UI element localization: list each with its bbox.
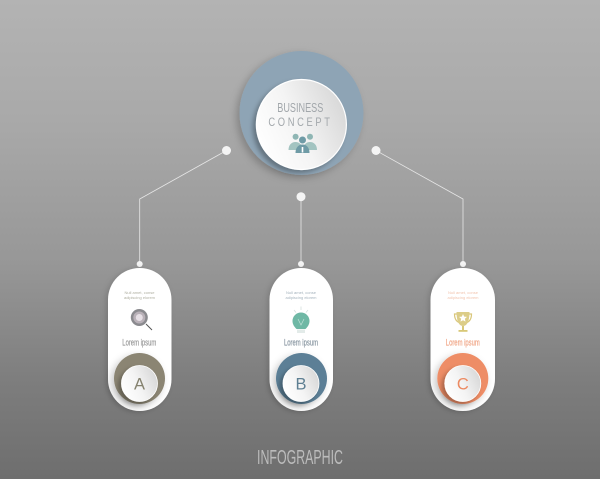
icon: trophy	[454, 312, 472, 332]
connector: centre	[296, 192, 306, 267]
card C small text: adipiscing elorem	[448, 295, 479, 300]
card B label: Lorem ipsum	[284, 338, 318, 348]
card B letter: B	[295, 376, 307, 394]
card A small text	[124, 290, 156, 300]
card B small text	[286, 290, 317, 300]
hub subheading: CONCEPT	[268, 116, 333, 129]
card C small text	[448, 290, 479, 300]
card C	[430, 268, 495, 411]
card A	[108, 268, 172, 411]
card C pill	[430, 268, 495, 411]
card B	[270, 268, 333, 411]
hub backing circle	[240, 51, 364, 175]
card B small text: adipiscing elorem	[286, 295, 317, 300]
hub white disc	[256, 80, 346, 170]
card A pill	[108, 268, 172, 411]
footer title: INFOGRAPHIC	[257, 447, 343, 469]
card A ring	[114, 353, 165, 404]
hub heading: BUSINESS	[277, 101, 323, 115]
card C disc	[445, 366, 481, 402]
card B disc	[283, 366, 319, 402]
card A small text: Null amet, conse	[124, 290, 155, 295]
icon: business people	[288, 134, 317, 153]
card C small text: Null amet, conse	[448, 290, 479, 295]
card B pill	[270, 268, 333, 411]
connector: left	[137, 146, 231, 267]
icon: magnifier	[131, 309, 152, 330]
card B small text: Null amet, conse	[286, 290, 317, 295]
card A label: Lorem ipsum	[122, 338, 156, 348]
central hub	[240, 51, 364, 175]
card C label: Lorem ipsum	[446, 338, 480, 348]
card C letter: C	[457, 376, 469, 394]
card A letter: A	[134, 376, 145, 394]
connector: right	[372, 146, 466, 267]
card A disc	[122, 366, 158, 402]
card A small text: adipiscing elorem	[124, 295, 156, 300]
card B ring	[276, 353, 327, 404]
card C ring	[437, 353, 488, 404]
icon: light bulb	[292, 306, 310, 333]
